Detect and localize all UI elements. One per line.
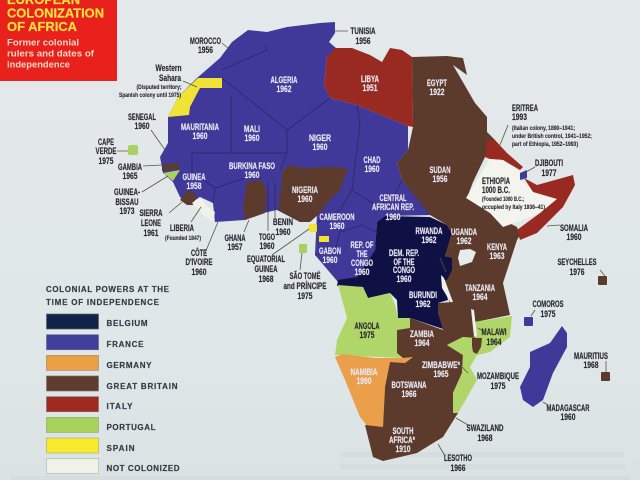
label: Angola: 1975 <box>360 330 375 340</box>
label: Madagascar <box>546 403 590 422</box>
label: Ethiopia <box>482 176 545 211</box>
label: Western Sahara <box>119 63 182 99</box>
label: Senegal: 1960 <box>134 121 150 131</box>
label: Zambia: 1964 <box>414 338 430 348</box>
label: Togo: 1960 <box>260 241 275 251</box>
label: Nigeria: 1960 <box>298 194 313 204</box>
region: Nigeria <box>278 165 348 222</box>
label: Algeria: ALGERIA <box>270 75 298 85</box>
legend item: France: FRANCE <box>106 340 144 349</box>
label: Gambia: GAMBIA <box>118 162 142 172</box>
label: Guinea-Bissau <box>114 187 140 216</box>
label: Mali: MALI <box>244 124 260 134</box>
region: Western Sahara <box>168 78 222 117</box>
label: Burkina Faso: 1960 <box>244 170 260 180</box>
legend item: Great Britain: GREAT BRITAIN <box>106 382 178 391</box>
region: Eritrea <box>485 140 523 170</box>
label: Democratic Republic of the Congo <box>389 248 419 284</box>
label: Botswana: BOTSWANA <box>392 380 427 390</box>
region: Liberia <box>192 197 215 222</box>
label: Eritrea: part of Ethiopia, 1952–1993) <box>512 141 578 148</box>
label: Djibouti: 1977 <box>542 168 557 178</box>
region: Djibouti <box>520 170 527 180</box>
region: Libya <box>324 48 413 127</box>
label: Tunisia <box>350 26 376 46</box>
label: Zambia <box>410 329 434 348</box>
label: Somalia: SOMALIA <box>560 223 588 233</box>
label: Lesotho <box>444 453 472 473</box>
label: Lesotho: 1966 <box>450 463 466 473</box>
legend item: Not colonized: NOT COLONIZED <box>106 464 180 473</box>
label: Democratic Republic of the Congo: OF THE <box>394 257 415 267</box>
island: Equatorial Guinea coast <box>319 236 329 242</box>
label: Togo <box>259 232 275 251</box>
label: Republic of the Congo: CONGO <box>351 258 373 268</box>
label: Malawi: 1964 <box>486 337 502 347</box>
label: Guinea: GUINEA <box>182 172 206 182</box>
label: Benin: BENIN <box>273 217 293 227</box>
label: Cape Verde: CAPE <box>98 137 114 147</box>
label: Somalia: 1960 <box>566 232 582 242</box>
label: Eritrea: under British control, 1941–1952; <box>512 133 592 140</box>
label: Equatorial Guinea <box>247 254 285 284</box>
legend item: Not colonized <box>46 459 180 474</box>
label: Egypt: EGYPT <box>427 78 447 88</box>
label: Uganda <box>451 227 477 246</box>
subtitle: Former colonial <box>7 38 79 48</box>
label: Tanzania <box>465 283 495 302</box>
label: Malawi <box>482 327 506 347</box>
label: Seychelles <box>558 257 597 277</box>
label: Burundi: 1962 <box>416 299 431 309</box>
label: Zambia: ZAMBIA <box>410 329 434 339</box>
label: Botswana <box>392 380 427 399</box>
label: Equatorial Guinea: EQUATORIAL <box>247 254 285 264</box>
legend item: Germany: GERMANY <box>106 361 152 370</box>
region: Namibia <box>335 354 413 427</box>
label: Comoros: COMOROS <box>532 299 564 309</box>
label: Ghana <box>224 233 246 252</box>
region: Ethiopia <box>466 159 557 227</box>
label: Djibouti: DJIBOUTI <box>535 158 563 168</box>
label: Ghana: 1957 <box>228 242 243 252</box>
subtitle: rulers and dates of <box>7 48 95 60</box>
title <box>7 0 104 34</box>
label: Republic of the Congo: 1960 <box>354 267 370 277</box>
region: Rwanda and Burundi <box>441 256 452 280</box>
label: Democratic Republic of the Congo: CONGO <box>393 265 415 275</box>
label: Ethiopia: occupied by Italy 1936–41) <box>482 204 545 211</box>
map of Africa <box>128 22 610 461</box>
label: Morocco <box>190 36 221 55</box>
island: Cape Verde <box>128 145 138 155</box>
label: Tanzania: 1964 <box>472 292 488 302</box>
label: South Africa: 1910 <box>396 444 411 454</box>
label: Sierra Leone: SIERRA <box>140 208 163 218</box>
region: French colonies <box>160 22 432 282</box>
label: Central African Republic <box>372 193 414 222</box>
legend item: Great Britain <box>46 376 178 391</box>
label: Cameroon: 1960 <box>330 221 345 231</box>
label: Côte d'Ivoire <box>186 247 213 277</box>
label: Guinea-Bissau: GUINEA- <box>114 187 140 197</box>
region: Belgian Congo <box>337 216 452 329</box>
label: Central African Republic: 1960 <box>386 212 401 222</box>
label: Liberia: (Founded 1847) <box>165 235 201 242</box>
region: Somalia <box>517 175 575 240</box>
label: Eritrea: ERITREA <box>512 103 538 113</box>
label: Gabon <box>319 246 341 265</box>
label: Mozambique: MOZAMBIQUE <box>477 371 519 381</box>
label: Algeria <box>270 75 298 94</box>
label: Cameroon <box>320 212 354 231</box>
label: Namibia: NAMIBIA <box>350 367 378 377</box>
label: Rwanda: 1962 <box>422 235 437 245</box>
label: Morocco: 1956 <box>198 45 213 55</box>
legend item: Spain <box>46 438 135 453</box>
label: Algeria: 1962 <box>276 84 292 94</box>
label: Equatorial Guinea: 1968 <box>258 274 274 284</box>
island: Mauritius <box>601 372 610 381</box>
label: Niger: 1960 <box>312 142 328 152</box>
label: Swaziland <box>466 423 504 443</box>
label: Côte d'Ivoire: D'IVOIRE <box>186 257 213 267</box>
region: Lake Tanganyika <box>441 275 453 303</box>
label: Seychelles: 1976 <box>570 267 585 277</box>
region: Guinea-Bissau <box>163 170 180 181</box>
label: Cape Verde: VERDE <box>96 146 117 156</box>
leader lines <box>117 31 606 456</box>
label: Western Sahara: Western <box>156 63 182 73</box>
label: Nigeria: NIGERIA <box>292 185 318 195</box>
label: Mauritania: 1960 <box>192 131 208 141</box>
label: Comoros: 1975 <box>540 309 556 319</box>
label: Angola: ANGOLA <box>354 321 380 331</box>
label: Burkina Faso: BURKINA FASO <box>229 161 275 171</box>
region: Mozambique <box>447 316 512 413</box>
label: Seychelles: SEYCHELLES <box>558 257 597 267</box>
label: Guinea: 1958 <box>186 181 202 191</box>
legend item: Portugal: PORTUGAL <box>106 423 156 432</box>
label: Benin: 1960 <box>276 227 291 237</box>
label: Eritrea <box>512 103 592 148</box>
subtitle: independence <box>7 60 70 70</box>
label: Zimbabwe: 1965 <box>434 369 449 379</box>
label: Central African Republic: AFRICAN REP. <box>372 202 414 212</box>
region: Ghana <box>243 180 267 220</box>
label: Togo: TOGO <box>259 232 275 242</box>
region: Madagascar <box>520 326 567 407</box>
legend heading <box>46 285 170 307</box>
label: Côte d'Ivoire: CÔTE <box>191 247 207 258</box>
label: Mauritius: 1968 <box>584 360 599 370</box>
label: Nigeria <box>292 185 318 204</box>
label: Western Sahara: (Disputed territory; <box>136 84 182 91</box>
label: Senegal: SENEGAL <box>128 112 156 122</box>
label: Liberia <box>165 223 201 242</box>
region: Lake Malawi <box>471 309 477 337</box>
label: Cape Verde <box>96 137 117 166</box>
title: OF AFRICA <box>7 19 78 34</box>
label: Madagascar: MADAGASCAR <box>546 403 590 413</box>
label: Uganda: 1962 <box>456 236 472 246</box>
island: São Tomé and Príncipe <box>299 244 307 253</box>
French colony borders <box>192 45 402 255</box>
label: São Tomé and Príncipe <box>284 271 327 301</box>
island: Comoros <box>524 317 533 326</box>
label: Tunisia: TUNISIA <box>350 26 376 36</box>
label: Zimbabwe: ZIMBABWE* <box>422 360 460 370</box>
label: Sierra Leone <box>140 208 163 238</box>
label: Liberia: LIBERIA <box>170 223 194 233</box>
label: Swaziland: 1968 <box>478 433 493 443</box>
label: Kenya <box>487 242 507 261</box>
label: Lesotho: LESOTHO <box>444 453 472 463</box>
label: South Africa <box>389 426 415 454</box>
label: Gabon: 1960 <box>322 255 338 265</box>
label: Djibouti <box>535 158 563 178</box>
legend heading: COLONIAL POWERS AT THE <box>46 285 170 294</box>
label: Sierra Leone: 1961 <box>144 228 159 238</box>
legend item: Spain: SPAIN <box>106 444 135 453</box>
label: Sudan: SUDAN <box>430 165 450 175</box>
label: Mozambique: 1975 <box>490 381 506 391</box>
region: Sierra Leone <box>180 190 197 205</box>
label: Mozambique <box>477 371 519 391</box>
label: Republic of the Congo <box>350 240 374 277</box>
label: Tunisia: 1956 <box>356 36 371 46</box>
label: Angola <box>354 321 380 340</box>
label: Mauritania: MAURITANIA <box>181 122 219 132</box>
label: Chad: 1960 <box>364 164 380 174</box>
label: Libya: LIBYA <box>361 74 379 84</box>
label: Republic of the Congo: REP. OF <box>350 240 374 250</box>
label: Egypt: 1922 <box>430 87 445 97</box>
title panel <box>0 0 117 81</box>
label: Uganda: UGANDA <box>451 227 477 237</box>
label: Rwanda: RWANDA <box>416 226 443 236</box>
label: Gabon: GABON <box>319 246 341 256</box>
label: Eritrea: (Italian colony, 1890–1941; <box>512 125 575 132</box>
region: Lake Victoria <box>458 249 476 266</box>
label: Libya <box>361 74 379 93</box>
label: Guinea-Bissau: BISSAU <box>116 197 138 207</box>
region: Egypt, Sudan, Uganda, Kenya, Tanzania <box>397 56 520 322</box>
label: Namibia: 1990 <box>356 376 372 386</box>
label: Namibia <box>350 367 378 386</box>
label: Gambia: 1965 <box>122 171 138 181</box>
legend item: Italy: ITALY <box>106 402 133 411</box>
label: Kenya: KENYA <box>487 242 507 252</box>
label: Equatorial Guinea: GUINEA <box>254 264 278 274</box>
region: Angola <box>335 285 410 358</box>
label: Burkina Faso <box>229 161 275 180</box>
label: Guinea-Bissau: 1973 <box>120 206 135 216</box>
label: Ethiopia: 1000 B.C. <box>482 185 510 195</box>
label: Republic of the Congo: THE <box>356 249 368 259</box>
label: Madagascar: 1960 <box>560 412 576 422</box>
title: COLONIZATION <box>7 6 104 20</box>
label: Western Sahara: Spanish colony until 1975) <box>119 92 181 99</box>
label: Cape Verde: 1975 <box>98 156 114 166</box>
label: Comoros <box>532 299 564 319</box>
legend item: Belgium: BELGIUM <box>106 319 148 328</box>
label: Central African Republic: CENTRAL <box>380 193 407 203</box>
label: Sudan <box>430 165 450 184</box>
label: Chad <box>364 155 380 174</box>
island: Seychelles <box>598 276 607 285</box>
legend item: Germany <box>46 355 152 370</box>
label: Mauritius: MAURITIUS <box>574 351 608 361</box>
subtitle <box>7 38 95 70</box>
label: Libya: 1951 <box>362 83 378 93</box>
label: São Tomé and Príncipe: SÃO TOMÉ <box>290 271 321 281</box>
label: Niger: NIGER <box>309 133 331 143</box>
region: Malawi <box>472 338 482 354</box>
label: São Tomé and Príncipe: 1975 <box>298 291 313 301</box>
label: Mali <box>244 124 260 143</box>
label: Niger <box>309 133 331 152</box>
label: Swaziland: SWAZILAND <box>466 423 504 433</box>
label: Egypt <box>427 78 447 97</box>
label: Morocco: MOROCCO <box>190 36 221 46</box>
legend item: France <box>46 335 144 350</box>
label: South Africa: SOUTH <box>392 426 414 436</box>
label: Somalia <box>560 223 588 242</box>
legend item: Portugal <box>46 417 156 432</box>
label: Sudan: 1956 <box>432 174 448 184</box>
legend <box>46 285 180 474</box>
label: Gambia <box>118 162 142 181</box>
label: Côte d'Ivoire: 1960 <box>192 267 207 277</box>
label: Mauritania <box>181 122 219 141</box>
label: Western Sahara: Sahara <box>159 73 181 83</box>
label: Rwanda <box>416 226 443 245</box>
label: Chad: CHAD <box>364 155 380 165</box>
label: Botswana: 1966 <box>402 389 417 399</box>
label: Eritrea: 1993 <box>512 112 527 122</box>
label: Kenya: 1963 <box>490 251 505 261</box>
label: Sierra Leone: LEONE <box>141 218 161 228</box>
legend heading: TIME OF INDEPENDENCE <box>46 298 160 307</box>
label: Cameroon: CAMEROON <box>320 212 354 222</box>
label: Malawi: MALAWI <box>482 327 506 337</box>
label: Ethiopia: ETHIOPIA <box>482 176 510 186</box>
region: Gambia <box>162 163 180 171</box>
island: Equatorial Guinea mainland <box>309 224 317 232</box>
label: Zimbabwe <box>422 360 460 379</box>
legend item: Belgium <box>46 314 148 329</box>
label: Ghana: GHANA <box>224 233 246 243</box>
label: Ethiopia: (Founded 1000 B.C.; <box>482 196 524 203</box>
legend item: Italy <box>46 397 133 412</box>
label: Mali: 1960 <box>244 133 260 143</box>
label: Benin <box>273 217 293 237</box>
label: South Africa: AFRICA* <box>389 435 415 445</box>
label: Burundi: BURUNDI <box>409 290 437 300</box>
label: Democratic Republic of the Congo: DEM. REP. <box>389 248 419 258</box>
label: Burundi <box>409 290 437 309</box>
label: Mauritius <box>574 351 608 370</box>
label: Tanzania: TANZANIA <box>465 283 495 293</box>
label: São Tomé and Príncipe: and PRÍNCIPE <box>284 281 327 291</box>
label: Senegal <box>128 112 156 131</box>
region: Zambia, Zimbabwe, Botswana, South Africa <box>365 302 475 461</box>
label: Democratic Republic of the Congo: 1960 <box>396 274 412 284</box>
label: Guinea <box>182 172 206 191</box>
